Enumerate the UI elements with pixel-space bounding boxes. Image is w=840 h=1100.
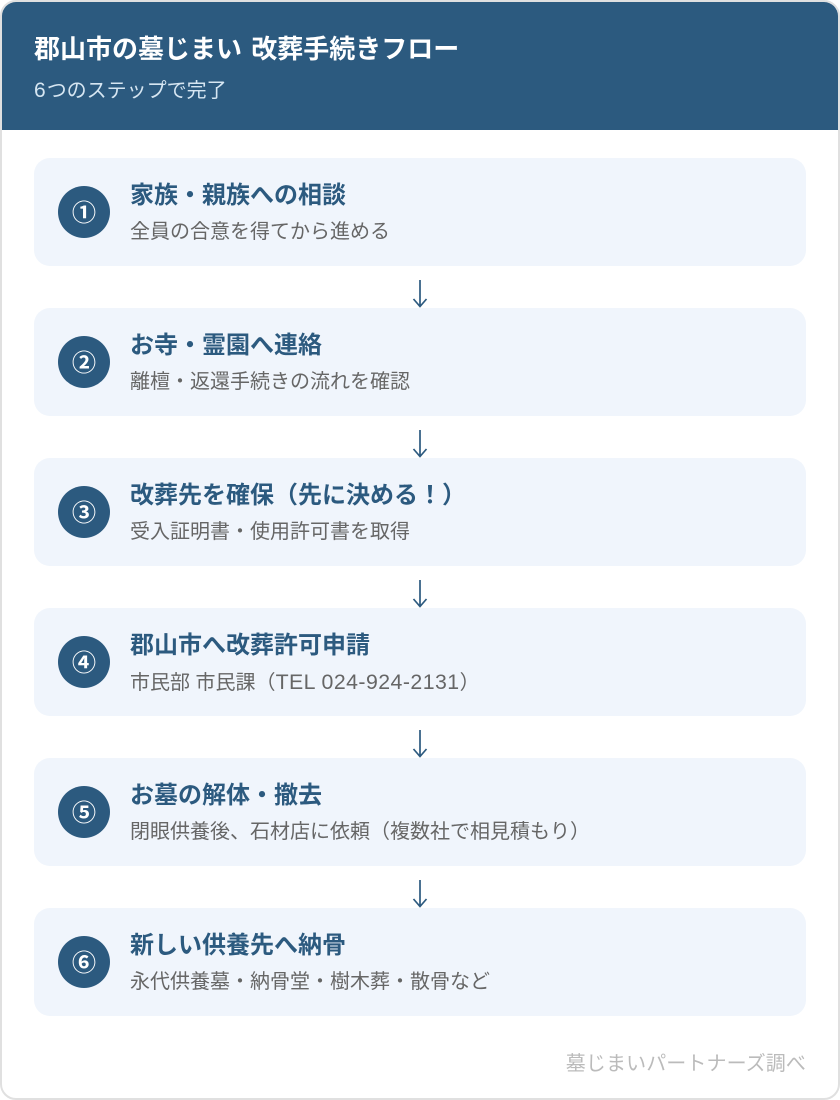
step 1 number: ① (72, 200, 96, 227)
step 4 card (34, 608, 806, 716)
step 6 number: ⑥ (72, 950, 96, 977)
step 5 number (58, 786, 110, 838)
step 1 card (34, 158, 806, 266)
step 4 description: 市民部 市民課（TEL 024-924-2131） (130, 670, 480, 694)
step 5 heading: お墓の解体・撤去 (130, 782, 322, 809)
arrow 3 to 4 (412, 580, 428, 608)
header (2, 2, 838, 130)
step 6 card (34, 908, 806, 1016)
arrow 1 to 2 (412, 280, 428, 308)
step 6 heading: 新しい供養先へ納骨 (130, 932, 346, 959)
step 5 card (34, 758, 806, 866)
step 4 heading: 郡山市へ改葬許可申請 (130, 632, 370, 659)
arrow 2 to 3 (412, 430, 428, 458)
step 2 number: ② (72, 350, 96, 377)
step 3 heading: 改葬先を確保（先に決める！） (130, 482, 466, 509)
step 6 number (58, 936, 110, 988)
step 3 number (58, 486, 110, 538)
step 2 card (34, 308, 806, 416)
step 2 heading: お寺・霊園へ連絡 (130, 332, 322, 359)
source note: 墓じまいパートナーズ調べ (566, 1053, 806, 1075)
step 4 number (58, 636, 110, 688)
arrow 4 to 5 (412, 730, 428, 758)
step 5 number: ⑤ (72, 800, 96, 827)
step 6 description: 永代供養墓・納骨堂・樹木葬・散骨など (130, 971, 490, 993)
step 3 card (34, 458, 806, 566)
step 1 description: 全員の合意を得てから進める (130, 221, 390, 243)
step 1 number (58, 186, 110, 238)
step 1 heading: 家族・親族への相談 (130, 182, 346, 209)
step 3 description: 受入証明書・使用許可書を取得 (130, 521, 410, 543)
step 2 number (58, 336, 110, 388)
arrow 5 to 6 (412, 880, 428, 908)
step 4 number: ④ (72, 650, 96, 677)
step 5 description: 閉眼供養後、石材店に依頼（複数社で相見積もり） (130, 821, 590, 843)
step 3 number: ③ (72, 500, 96, 527)
subtitle: 6つのステップで完了 (34, 79, 227, 102)
title: 郡山市の墓じまい 改葬手続きフロー (34, 34, 459, 64)
step 2 description: 離檀・返還手続きの流れを確認 (130, 371, 410, 393)
